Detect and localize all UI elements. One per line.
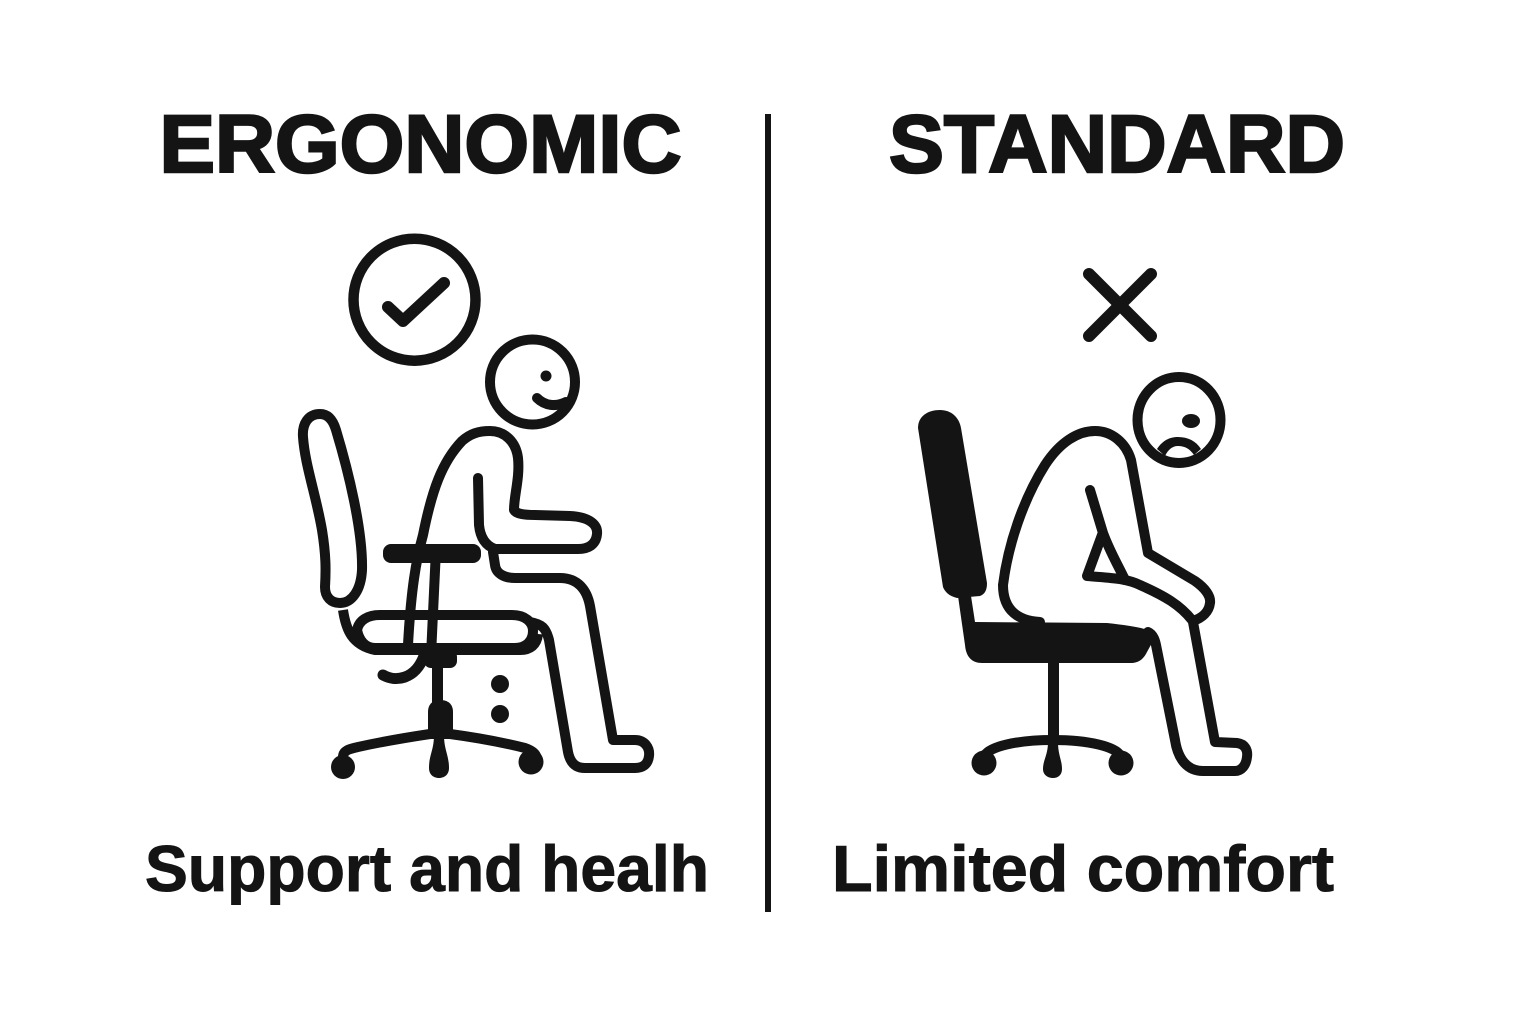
seat: solid with support xyxy=(958,596,1153,663)
caption: limited comfort: Limited comfort xyxy=(832,832,1334,905)
body: upright torso and arm xyxy=(408,431,597,645)
leg: thigh shin and foot xyxy=(493,552,649,768)
caption: support and health: Support and healh xyxy=(145,832,709,905)
armrest: ergonomic pad xyxy=(383,544,481,563)
icon: cross mark xyxy=(1089,274,1151,336)
divider line xyxy=(765,114,771,912)
head: smiling xyxy=(490,340,575,424)
title: standard: STANDARD xyxy=(889,99,1345,190)
base: ergonomic column and casters xyxy=(331,650,544,779)
figure: standard slouching person and chair xyxy=(918,377,1247,778)
armrest: post xyxy=(432,560,436,645)
title: ergonomic: ERGONOMIC xyxy=(160,99,682,190)
seat: cushion xyxy=(357,615,533,648)
lever xyxy=(383,656,424,679)
base: column xyxy=(1048,663,1059,741)
head: sad xyxy=(1138,377,1220,463)
base: legs and casters xyxy=(972,740,1134,778)
adjustment dots xyxy=(491,675,509,723)
base: legs xyxy=(343,734,537,760)
body: slouched torso and legs xyxy=(1003,431,1247,771)
figure: ergonomic seated person and chair xyxy=(303,340,649,768)
backrest: outline xyxy=(303,414,362,603)
icon: check mark in circle xyxy=(354,239,476,361)
backrest: solid xyxy=(918,410,987,598)
seat: support bracket xyxy=(343,610,538,650)
